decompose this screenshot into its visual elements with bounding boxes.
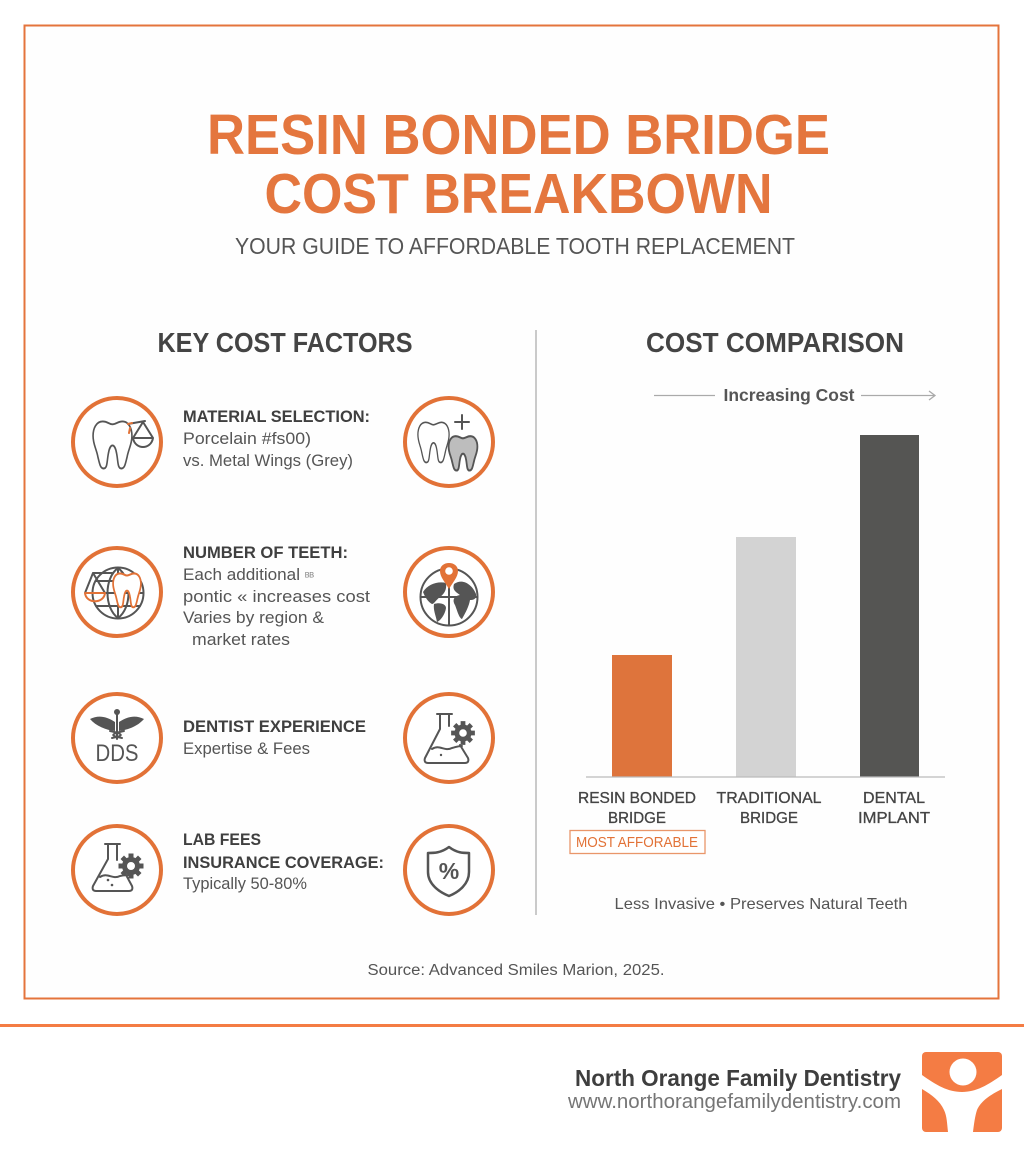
footer rule <box>0 1024 1024 1027</box>
subtitle: YOUR GUIDE TO AFFORDABLE TOOTH REPLACEMENT <box>235 233 795 259</box>
text: material selection <box>183 407 370 470</box>
panel: cost comparison <box>570 385 945 913</box>
callout: most affordable <box>570 830 705 854</box>
bar: resin bonded bridge <box>612 655 672 777</box>
label: resin bonded bridge <box>578 790 696 827</box>
title <box>207 103 830 226</box>
label: resin bonded bridge: BRIDGE <box>608 810 666 827</box>
logo <box>922 1052 1002 1132</box>
text: lab fees and insurance coverage: INSURANCE COVERAGE: <box>183 853 384 872</box>
icon: two teeth with plus <box>405 398 493 486</box>
label: resin bonded bridge: RESIN BONDED <box>578 790 696 807</box>
icon: caduceus DDS <box>73 694 161 782</box>
title: RESIN BONDED BRIDGE <box>207 103 830 167</box>
bar chart <box>586 435 945 777</box>
callout: most affordable: MOST AFFORABLE <box>576 835 698 851</box>
text: number of teeth: NUMBER OF TEETH: <box>183 543 348 562</box>
label: dental implant <box>858 790 930 827</box>
arrow: increasing cost <box>654 385 935 405</box>
panel: key cost factors <box>73 398 493 914</box>
text: number of teeth: Varies by region & <box>183 609 324 627</box>
text: number of teeth: pontic « increases cost <box>183 588 370 606</box>
text: dentist experience: Expertise & Fees <box>183 740 310 758</box>
text: lab fees and insurance coverage: Typically 50-80% <box>183 875 307 893</box>
source: Source: Advanced Smiles Marion, 2025. <box>368 962 664 979</box>
text: dentist experience <box>183 717 366 758</box>
text: dentist experience: DENTIST EXPERIENCE <box>183 717 366 736</box>
icon: scales, globe and tooth <box>73 548 161 636</box>
text: number of teeth: ᴮᴮ <box>305 571 315 583</box>
text: material selection: Porcelain #fs00) <box>183 430 311 448</box>
bar: traditional bridge <box>736 537 796 777</box>
bar: dental implant <box>860 435 919 777</box>
icon: flask and gear, lab fees <box>73 826 161 914</box>
divider <box>535 330 537 915</box>
label: dental implant: DENTAL <box>863 790 925 807</box>
icon: tooth and scales <box>73 398 161 486</box>
icon: globe with location pin <box>405 548 493 636</box>
title: COST BREAKBOWN <box>264 162 772 226</box>
arrow: increasing cost: Increasing Cost <box>724 385 855 405</box>
icon: flask and gear <box>405 694 493 782</box>
label: traditional bridge: TRADITIONAL <box>716 790 822 807</box>
text: material selection: vs. Metal Wings (Grey) <box>183 452 353 470</box>
icon: shield with percent <box>405 826 493 914</box>
text: number of teeth: Each additional <box>183 566 300 584</box>
text: number of teeth <box>183 543 370 649</box>
icon: caduceus DDS: DDS <box>96 740 138 767</box>
label: traditional bridge: BRIDGE <box>740 810 798 827</box>
text: material selection: MATERIAL SELECTION: <box>183 407 370 426</box>
footer: practice name and url: www.northorangefamilydentistry.com <box>567 1091 901 1113</box>
label: traditional bridge <box>716 790 822 827</box>
footer: practice name and url <box>567 1065 901 1113</box>
heading: key cost factors: KEY COST FACTORS <box>158 327 412 358</box>
heading: cost comparison: COST COMPARISON <box>646 327 904 358</box>
note: benefits: Less Invasive • Preserves Natural Teeth <box>614 896 908 913</box>
text: number of teeth: market rates <box>192 631 290 649</box>
icon: shield with percent: % <box>439 858 459 884</box>
text: lab fees and insurance coverage: LAB FEES <box>183 830 261 849</box>
footer: practice name and url: North Orange Family Dentistry <box>575 1065 901 1091</box>
label: dental implant: IMPLANT <box>858 810 930 827</box>
text: lab fees and insurance coverage <box>183 830 384 893</box>
